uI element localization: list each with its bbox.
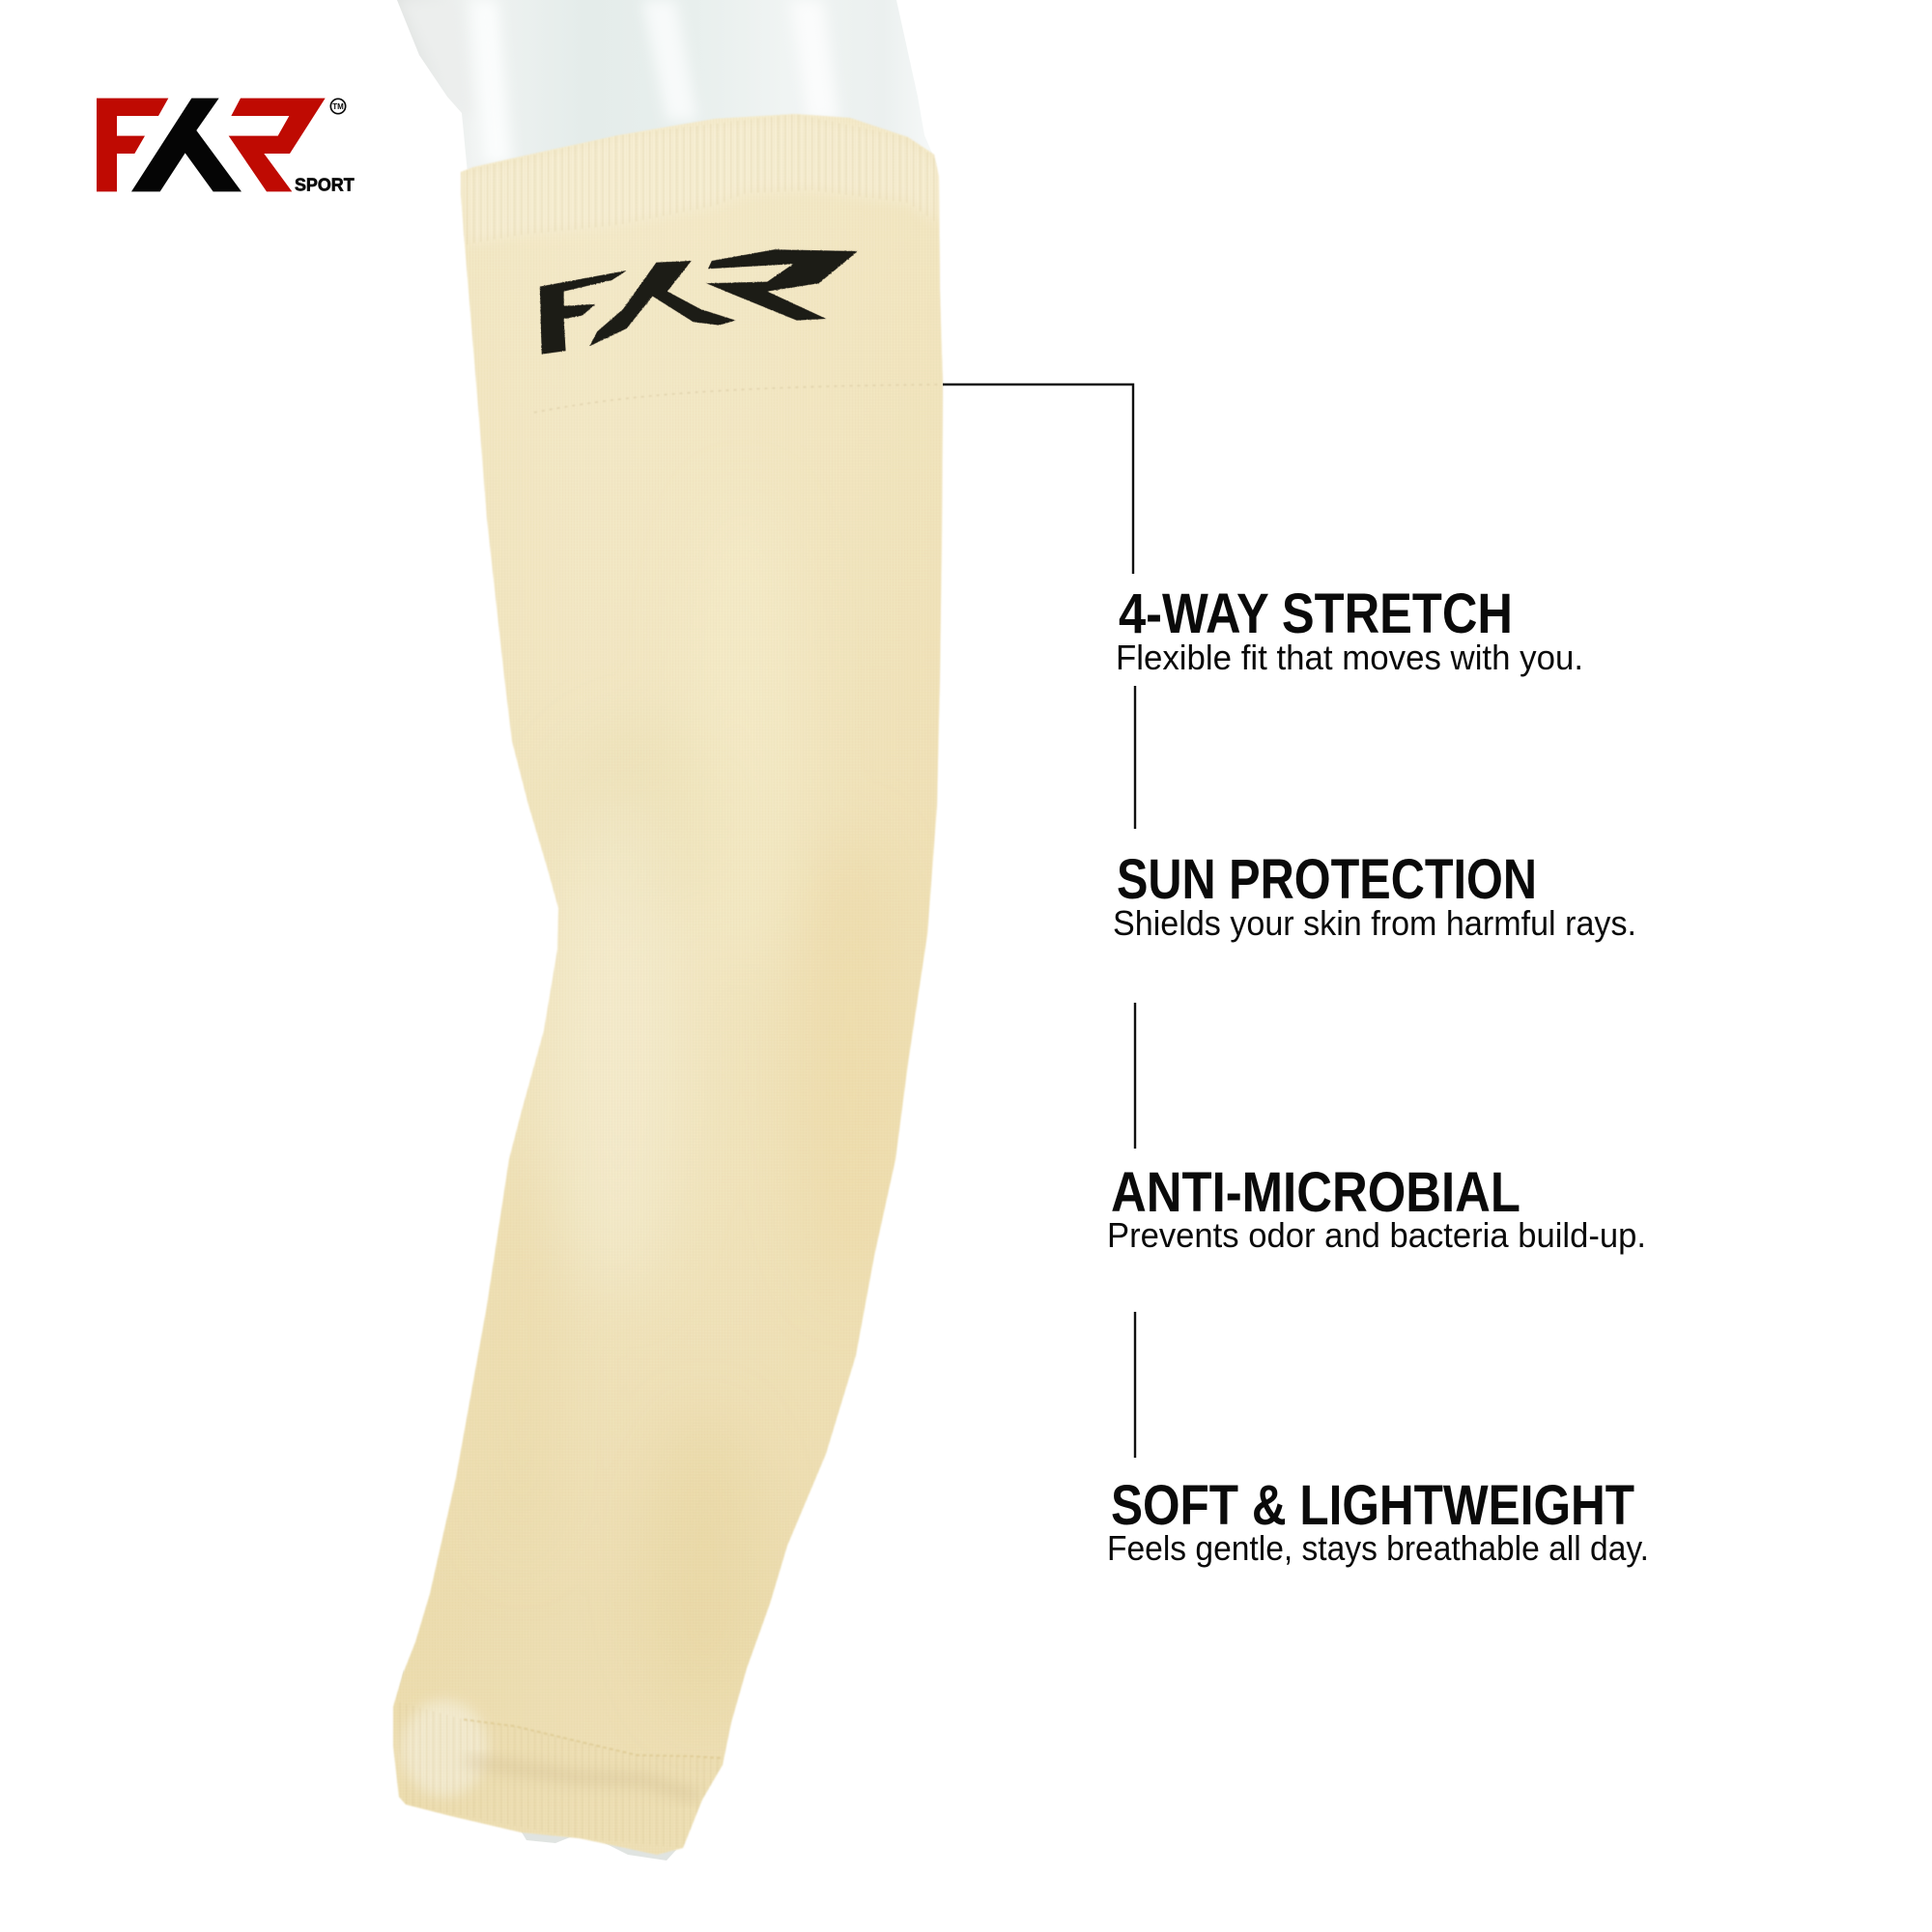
heading: SOFT & LIGHTWEIGHT — [1111, 1474, 1634, 1537]
brand logo — [97, 99, 355, 194]
infographic canvas — [97, 0, 1646, 1861]
sport wordmark: SPORT — [295, 174, 355, 194]
feature: sun protection — [1113, 848, 1636, 943]
feature: anti-microbial — [1107, 1161, 1646, 1255]
mannequin base peeking below the sleeve — [394, 1669, 676, 1861]
heading: SUN PROTECTION — [1117, 848, 1537, 911]
logo letter F — [97, 99, 168, 191]
woven sleeve logo — [540, 249, 858, 355]
trademark mark — [330, 99, 346, 114]
logo letter K — [131, 99, 242, 191]
description: Prevents odor and bacteria build-up. — [1107, 1215, 1646, 1255]
heading: 4-WAY STRETCH — [1119, 582, 1513, 645]
connector lines — [943, 384, 1135, 1458]
description: Feels gentle, stays breathable all day. — [1107, 1528, 1649, 1568]
mannequin arm — [397, 0, 937, 184]
trademark mark: TM — [332, 102, 344, 111]
sleeve — [386, 106, 966, 1874]
description: Flexible fit that moves with you. — [1116, 638, 1583, 677]
fabric shading — [560, 893, 881, 1670]
top cuff band — [461, 114, 942, 244]
bottom cuff band — [400, 1709, 718, 1846]
logo letter R — [229, 99, 326, 191]
feature: soft and lightweight — [1107, 1474, 1649, 1568]
description: Shields your skin from harmful rays. — [1113, 903, 1636, 943]
feature: 4-way stretch — [1116, 582, 1583, 677]
heading: ANTI-MICROBIAL — [1111, 1161, 1520, 1224]
